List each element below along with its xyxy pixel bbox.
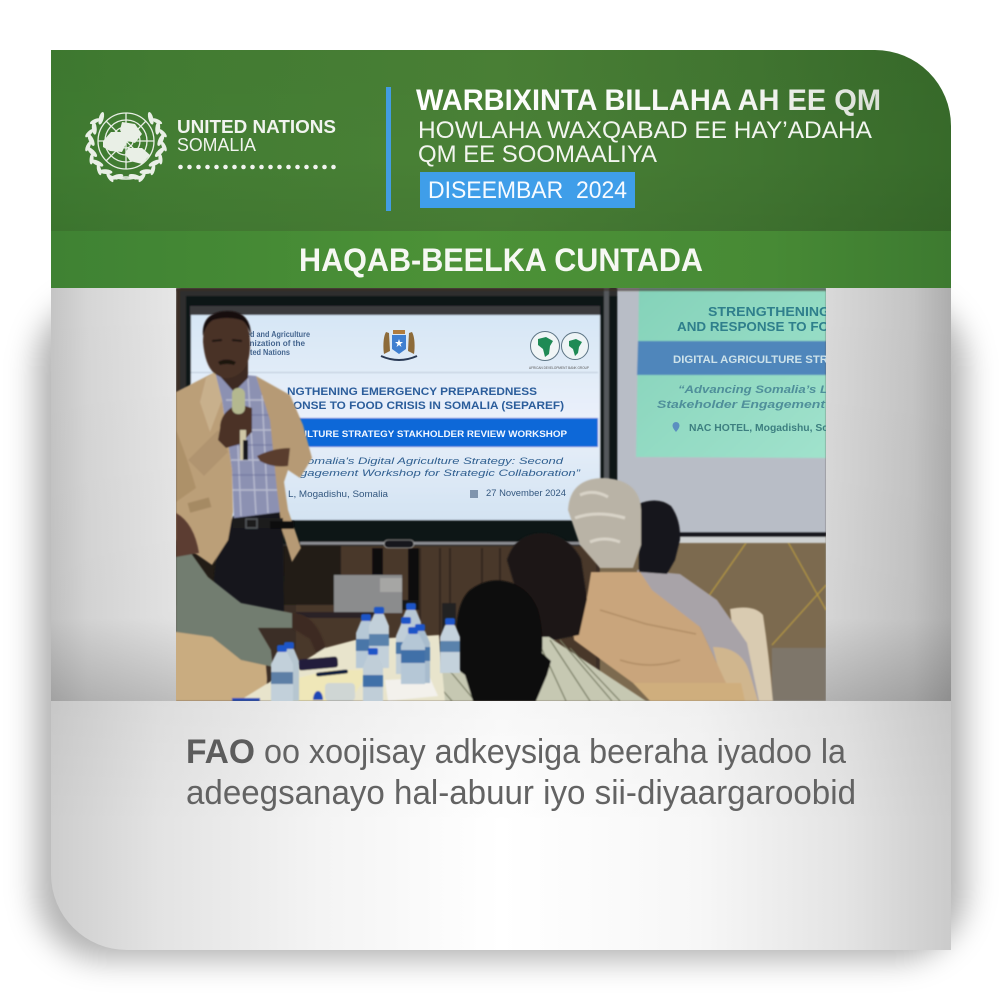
- striped shirt: [435, 637, 646, 701]
- audience and table: [174, 478, 773, 701]
- microphone: [232, 388, 248, 460]
- man with dark hair: [507, 533, 587, 643]
- water bottle 7: [440, 618, 460, 673]
- lower caption panel: [51, 701, 951, 950]
- Somalia wordmark: SOMALIA: [177, 134, 257, 155]
- subtitle line 1: HOWLAHA WAXQABAD EE HAY’ADAHA: [418, 117, 872, 144]
- left gray side panel: [51, 288, 176, 701]
- subtitle line 2: QM EE SOOMAALIYA: [418, 141, 657, 168]
- caption bold lead: FAO: [186, 733, 255, 771]
- front head silhouette: [456, 580, 551, 701]
- projected slide text: NAC HOTEL, Mogadishu, Sc: [689, 422, 828, 434]
- far chair: [730, 607, 773, 701]
- monitor slide text: ed and Agriculture: [246, 329, 310, 339]
- water bottle 4: [395, 616, 412, 674]
- projector screen: [610, 288, 826, 543]
- water bottle 2: [369, 607, 389, 668]
- projected slide text: DIGITAL AGRICULTURE STR: [673, 354, 828, 366]
- dotted rule: [178, 165, 336, 169]
- emblem: United Nations logo: [84, 111, 168, 183]
- man with white hair: [568, 478, 726, 683]
- water bottle 10: [363, 648, 383, 707]
- monitor slide text: ONSE TO FOOD CRISIS IN SOMALIA (SEPAREF): [293, 400, 564, 412]
- globe rings: [98, 113, 154, 169]
- blazer: [176, 372, 312, 565]
- monitor slide text: ULTURE STRATEGY STAKHOLDER REVIEW WORKSHOP: [300, 429, 568, 440]
- globe continents: [103, 122, 150, 164]
- monitor slide text: ted Nations: [250, 347, 290, 357]
- date badge: DISEEMBAR 2024: [428, 177, 627, 204]
- section band: [51, 231, 951, 288]
- room background: [176, 288, 826, 701]
- projected slide text: AND RESPONSE TO FO: [677, 320, 829, 334]
- header panel: [51, 50, 951, 231]
- seated man shirt: [174, 513, 326, 701]
- projected slide text: [657, 305, 830, 434]
- United Nations wordmark: UNITED NATIONS: [177, 117, 336, 137]
- caption text: [186, 733, 856, 812]
- man in lavender shirt: [637, 500, 759, 701]
- conference table: [232, 635, 445, 701]
- monitor slide text: AFRICAN DEVELOPMENT BANK GROUP: [529, 366, 590, 370]
- report title: WARBIXINTA BILLAHA AH EE QM: [416, 84, 881, 117]
- section heading: HAQAB-BEELKA CUNTADA: [299, 242, 703, 278]
- projected slide text: STRENGTHENING: [708, 305, 830, 319]
- caption line 2: adeegsanayo hal-abuur iyo sii-diyaargaroobid: [186, 774, 856, 812]
- water bottles: [271, 603, 460, 707]
- display monitor: [176, 288, 826, 548]
- projected slide text: Stakeholder Engagement: [657, 399, 827, 411]
- water bottle 6: [401, 627, 425, 684]
- trousers: [210, 510, 284, 612]
- logo: African Development Bank: [530, 332, 588, 360]
- monitor slide text: [245, 329, 590, 499]
- laurel ribbon: [110, 176, 142, 179]
- head and neck: [203, 311, 251, 392]
- monitor slide text: anization of the: [245, 338, 305, 348]
- photo: workshop presentation: [174, 288, 830, 707]
- monitor slide text: gagement Workshop for Strategic Collaboration”: [300, 468, 581, 479]
- monitor slide text: NGTHENING EMERGENCY PREPAREDNESS: [287, 386, 537, 398]
- monitor slide text: L, Mogadishu, Somalia: [288, 489, 388, 499]
- standing presenter: [176, 311, 312, 612]
- shirt: [215, 372, 281, 518]
- caption line 1: oo xoojisay adkeysiga beeraha iyadoo la: [264, 733, 846, 771]
- left laurel: [84, 111, 124, 183]
- projected slide text: “Advancing Somalia’s L: [678, 384, 828, 396]
- monitor slide text: omalia's Digital Agriculture Strategy: Second: [307, 456, 564, 467]
- monitor slide text: 27 November 2024: [486, 488, 566, 498]
- report subtitle: [418, 117, 872, 168]
- forearm and hand holding microphone: [188, 404, 252, 476]
- water bottle 9: [271, 645, 293, 704]
- card drop shadow: [36, 296, 966, 960]
- logo: Somalia coat of arms: [381, 330, 417, 360]
- water bottle 8: [279, 642, 299, 701]
- right gray side panel: [826, 288, 951, 701]
- header divider: [386, 87, 391, 211]
- water bottle 1: [355, 613, 372, 668]
- near tan chair: [713, 647, 758, 701]
- gesturing hand: [257, 448, 290, 466]
- water bottle 3: [400, 602, 422, 628]
- chair base: [633, 683, 745, 701]
- right laurel: [128, 111, 168, 183]
- belt: [233, 518, 294, 529]
- water bottle 5: [414, 623, 431, 684]
- organisation name: [177, 117, 336, 169]
